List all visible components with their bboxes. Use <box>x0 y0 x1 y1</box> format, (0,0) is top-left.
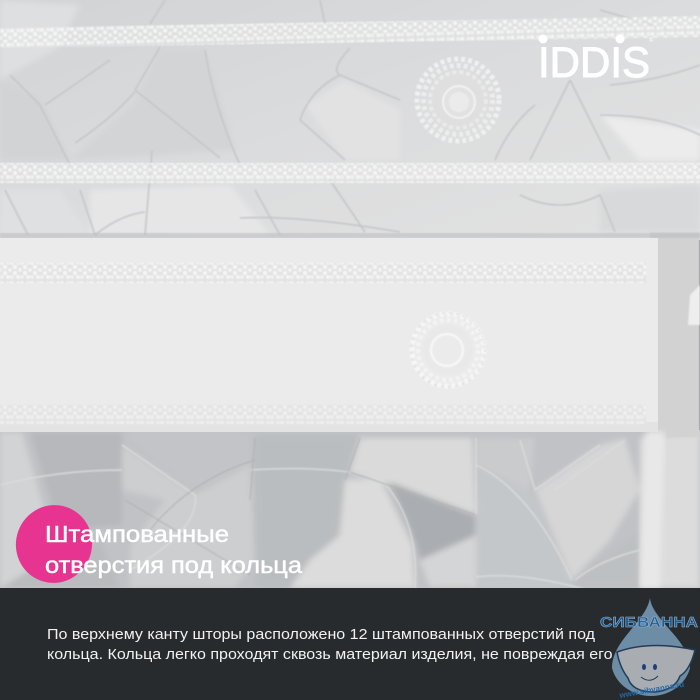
brand logo: IDDIS: IDDIS <box>538 39 650 87</box>
title: отверстия под кольца <box>45 552 302 578</box>
lace seam 3 <box>0 263 646 283</box>
curtain photo: upper layer <box>0 0 700 240</box>
brand logo: IDDIS: ® <box>649 37 654 44</box>
caption text: По верхнему канту шторы расположено 12 штампованных отверстий под <box>47 626 595 643</box>
right curtain fold <box>640 232 700 588</box>
watermark: Sibvanna drop logo <box>600 598 699 700</box>
stamped ring 2 <box>411 313 485 387</box>
title: Штампованные <box>45 521 229 547</box>
title <box>45 521 302 578</box>
curtain photo: lower layer <box>0 430 700 600</box>
watermark: Sibvanna drop logo: СИБВАННА <box>600 615 699 631</box>
caption text <box>47 626 617 663</box>
caption text: кольца. Кольца легко проходят сквозь материал изделия, не повреждая его. <box>47 646 617 663</box>
lace seam 4 <box>0 404 646 424</box>
lace seam 1 <box>0 16 700 48</box>
folded top flap <box>0 238 658 432</box>
watermark: Sibvanna drop logo: www.sibvanna.ru <box>618 680 685 700</box>
dark caption panel <box>0 588 700 700</box>
pink accent circle <box>5 494 103 594</box>
stamped ring 1 <box>417 59 499 141</box>
shadow above flap <box>0 233 700 238</box>
lace seam 2 <box>0 163 700 183</box>
